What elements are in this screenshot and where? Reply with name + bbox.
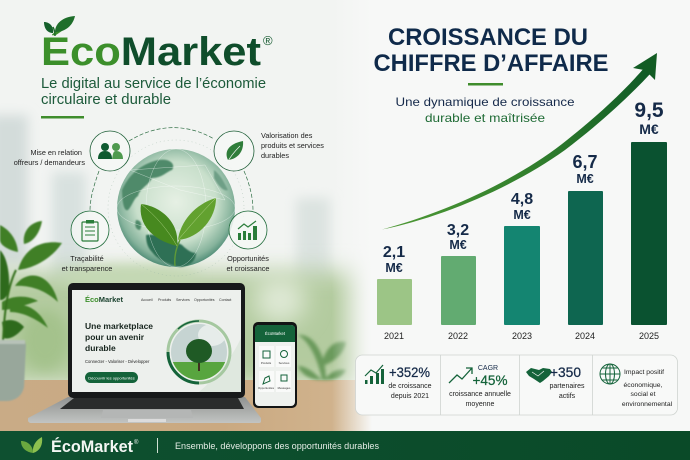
bar 2023: 4,8 [511,191,533,208]
background [0,108,369,431]
footer [0,431,690,460]
stat: impact: économique, [624,382,663,389]
label: valorisation: durables [261,151,289,160]
orbit [90,128,253,276]
bar 2024: 6,7 [572,152,598,172]
bar 2024: 2024 [575,331,595,341]
tagline: circulaire et durable [41,92,171,108]
stat: partners: actifs [559,393,576,400]
subtitle: durable et maîtrisée [425,111,545,125]
laptop screen: pour un avenir [85,332,145,342]
stat: partners: partenaires [549,383,585,390]
laptop [28,283,261,423]
stat: 352: de croissance [388,383,432,390]
title [374,24,608,77]
stat: 352: +352% [389,364,430,380]
laptop screen: Connecter - Valoriser - Développer [85,359,150,364]
stat: CAGR: moyenne [466,401,495,408]
subtitle [396,95,575,125]
icon: two leaves [141,198,216,266]
label: opportunites: Opportunités [227,254,269,263]
label: tracabilite [62,254,112,273]
stat: impact: social et [631,391,656,398]
stat: CAGR: croissance annuelle [449,391,511,398]
tagline [41,76,266,108]
bar 2025: 9,5 [634,99,664,122]
bar 2023 [504,191,540,341]
logo: ® [263,33,273,48]
stat: partners [526,364,585,400]
laptop screen: durable [85,343,116,353]
bar 2022 [441,222,476,341]
bar 2023: 2023 [512,331,532,341]
laptop screen [72,290,241,392]
icon: people [90,131,130,171]
stat: impact: environnemental [622,401,673,408]
bar 2023: M€ [513,208,531,222]
label: valorisation [261,131,324,160]
footer: ® [134,439,139,446]
icon: logo sprout [44,16,75,36]
bar 2021: 2021 [384,331,404,341]
panel: statistics [356,355,678,415]
bar 2021: M€ [385,261,403,275]
footer: ÉcoMarket [51,437,133,456]
laptop screen: Services [176,298,190,302]
stat: CAGR: +45% [472,372,508,388]
plant and pot [0,221,62,401]
blurred plant at right of table [298,335,346,380]
stat: impact: Impact positif [624,369,664,376]
title: CHIFFRE D’AFFAIRE [374,50,608,77]
bar 2025: 2025 [639,331,659,341]
title: CROISSANCE DU [388,24,588,51]
bar 2024 [568,152,603,341]
logo [41,16,273,74]
laptop screen: Contact [219,298,231,302]
subtitle: Une dynamique de croissance [396,95,575,109]
bar 2022: M€ [449,238,467,252]
phone: ÉcoMarket [265,331,286,336]
stat: CAGR: CAGR [478,365,498,372]
phone: Opportunités [258,386,275,390]
label: valorisation: Valorisation des [261,131,313,140]
laptop screen: Opportunités [194,298,215,302]
bar 2021: 2,1 [383,244,405,261]
laptop screen: ÉcoMarket [85,295,123,304]
tagline: Le digital au service de l’économie [41,76,266,92]
label: mise en relation [14,148,85,167]
footer: Ensemble, développons des opportunités durables [175,441,379,452]
phone: Produits [261,361,272,365]
laptop screen: Une marketplace [85,321,153,331]
stat: CAGR [449,365,511,408]
phone: Services [279,361,290,365]
label: opportunites [226,254,270,273]
phone: Messages [278,386,291,390]
label: tracabilite: Traçabilité [70,254,104,263]
label: mise en relation: offreurs / demandeurs [14,158,85,167]
icon: footer leaves [21,437,42,453]
stat: 352: depuis 2021 [391,393,429,400]
bar chart [377,99,667,341]
bar 2022: 3,2 [447,222,469,239]
label: mise en relation: Mise en relation [30,148,82,157]
laptop screen: Découvrir les opportunités [88,376,135,380]
bar 2021 [377,244,412,341]
stat: impact [600,364,673,408]
label: valorisation: produits et services [261,141,324,150]
icon: chart [229,211,267,249]
bar 2024: M€ [576,172,594,186]
bar 2025 [631,99,667,341]
icon: clipboard [71,211,109,249]
phone [253,322,297,408]
growth arrow [382,53,657,230]
stat: partners: +350 [550,364,581,380]
bar 2022: 2022 [448,331,468,341]
label: tracabilite: et transparence [62,264,112,273]
icon: leaf [214,131,254,171]
globe [117,149,235,267]
laptop screen: Produits [158,298,171,302]
stat: 352 [365,364,432,400]
laptop screen: Accueil [141,298,153,302]
bar 2025: M€ [639,121,659,137]
label: opportunites: et croissance [226,264,270,273]
logo: ÉcoMarket [41,29,261,74]
